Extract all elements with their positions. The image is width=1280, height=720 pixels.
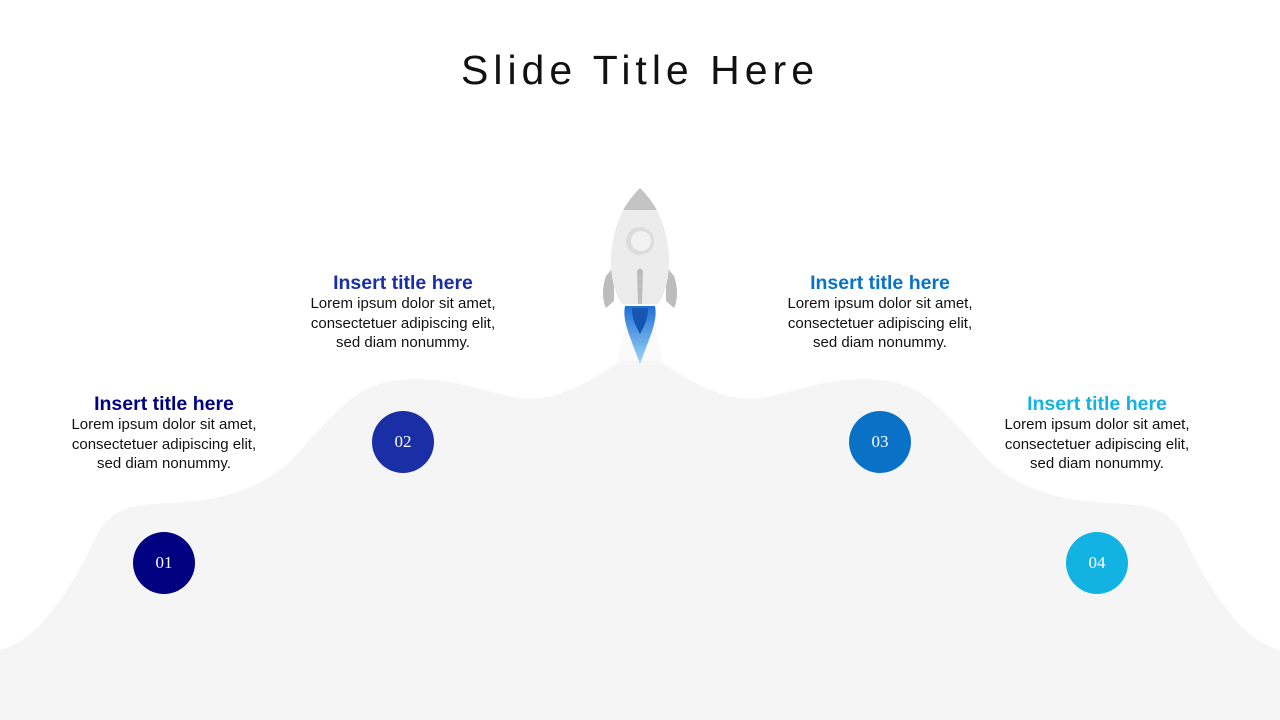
step 04 text [1004, 393, 1190, 472]
circle 04 [1066, 532, 1128, 594]
step 01 text [71, 393, 257, 472]
circle 01 [133, 532, 195, 594]
step 03 text [787, 272, 973, 351]
circle 04: 04 [1088, 553, 1106, 572]
step 04 text: Lorem ipsum dolor sit amet, [1004, 416, 1190, 433]
step 03 text: Insert title here [810, 272, 950, 294]
circle 02 [372, 411, 434, 473]
step 02 text: Lorem ipsum dolor sit amet, [310, 295, 496, 312]
step 03 text: sed diam nonummy. [813, 334, 947, 351]
title: Slide Title Here [461, 47, 819, 93]
icon: rocket [603, 188, 677, 364]
step 04 text: Insert title here [1027, 393, 1167, 415]
step 03 text: consectetuer adipiscing elit, [788, 314, 972, 332]
circle 01: 01 [156, 553, 172, 572]
step 04 text: sed diam nonummy. [1030, 455, 1164, 472]
step 01 text: Insert title here [94, 393, 234, 415]
step 01 text: sed diam nonummy. [97, 455, 231, 472]
step 01 text: consectetuer adipiscing elit, [72, 436, 256, 452]
circle 03 [849, 411, 911, 473]
step 02 text [310, 272, 496, 351]
circle 03: 03 [872, 432, 888, 451]
circle 02: 02 [394, 432, 412, 451]
step 01 text: Lorem ipsum dolor sit amet, [71, 416, 257, 433]
step 04 text: consectetuer adipiscing elit, [1005, 436, 1189, 452]
step 02 text: sed diam nonummy. [336, 334, 470, 351]
step 03 text: Lorem ipsum dolor sit amet, [787, 295, 973, 312]
step 02 text: consectetuer adipiscing elit, [311, 314, 495, 332]
step 02 text: Insert title here [333, 272, 473, 294]
